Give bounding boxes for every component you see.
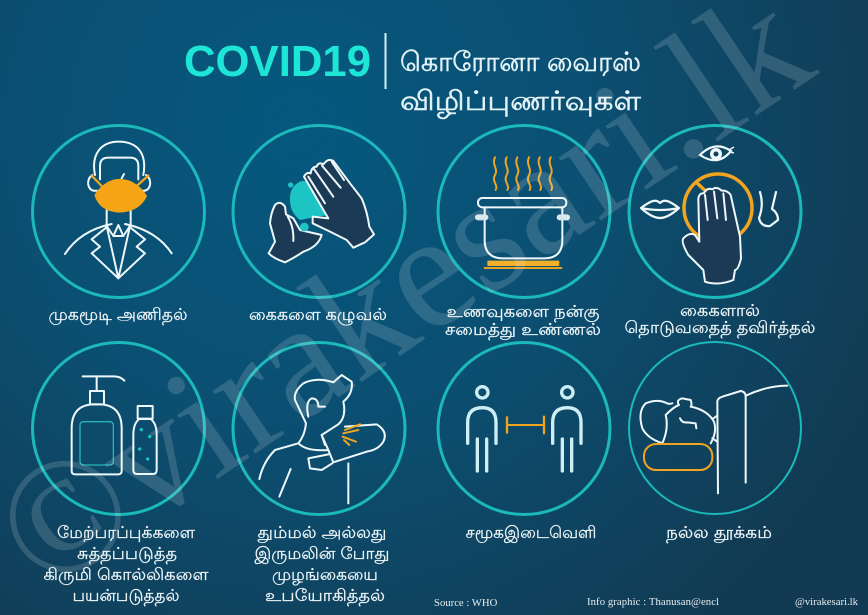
panel: do not touch face	[629, 126, 801, 298]
label: sanitiser	[44, 524, 210, 605]
icon: hand and face parts	[641, 146, 778, 283]
label: cover cough: தும்மல் அல்லது	[258, 524, 386, 543]
label: do not touch face	[624, 302, 816, 337]
label: do not touch face: தொடுவதைத் தவிர்த்தல்	[624, 319, 816, 337]
icon: washing hands	[269, 160, 374, 262]
label: do not touch face: கைகளால்	[680, 302, 760, 320]
icon: person coughing into elbow	[259, 375, 385, 503]
label: cover cough: உபயோகித்தல்	[265, 587, 385, 605]
icon: hand	[683, 188, 741, 283]
title	[184, 33, 642, 119]
label: sanitiser: கிருமி கொல்லிகளை	[44, 566, 210, 585]
title: Tamil	[400, 47, 642, 119]
label: sanitiser: மேற்பரப்புக்களை	[57, 524, 196, 542]
panel: cover cough	[233, 342, 405, 514]
panel: cook food	[438, 126, 610, 298]
label: cover cough: முழங்கையை	[272, 566, 378, 585]
ring	[438, 126, 610, 298]
icon: sleeping person	[640, 386, 787, 493]
label: cook food: சமைத்து உண்ணல்	[445, 321, 601, 340]
icon: sanitiser bottles	[72, 376, 157, 474]
icon: no-touch sign	[684, 174, 752, 242]
icon: lips	[641, 201, 679, 218]
label: good sleep: நல்ல தூக்கம்	[666, 524, 772, 543]
label: cook food	[445, 303, 601, 340]
label: cover cough: இருமலின் போது	[254, 545, 390, 564]
label: face mask: முகமூடி அணிதல்	[48, 306, 188, 325]
panel: good sleep	[629, 342, 801, 514]
icon: eye	[700, 146, 734, 160]
title: COVID19: COVID19	[184, 37, 371, 86]
footer: handle: @virakesari.lk	[795, 596, 859, 608]
icon: two people apart	[468, 387, 581, 471]
panel: sanitiser	[32, 342, 204, 514]
title: Tamil: விழிப்புணர்வுகள்	[400, 86, 642, 119]
title divider	[384, 33, 386, 89]
ring	[629, 342, 801, 514]
footer: source: Source : WHO	[434, 597, 498, 609]
icon: nose	[759, 192, 778, 226]
ring	[233, 342, 405, 514]
label: cook food: உணவுகளை நன்கு	[446, 303, 600, 322]
panel: face mask	[32, 126, 204, 298]
label: sanitiser: பயன்படுத்தல்	[72, 587, 180, 605]
ring	[32, 342, 204, 514]
footer: credit: Info graphic : Thanusan@encl	[587, 596, 719, 608]
panel: distancing	[438, 342, 610, 514]
label: sanitiser: சுத்தப்படுத்த	[77, 545, 177, 563]
label: hand wash: கைகளை கழுவல்	[249, 306, 387, 325]
ring	[438, 342, 610, 514]
panel: hand wash	[233, 126, 405, 298]
icon: person wearing mask	[65, 142, 172, 278]
ring	[32, 126, 204, 298]
label: distancing: சமூகஇடைவெளி	[466, 524, 596, 543]
label: cover cough	[254, 524, 390, 605]
ring	[629, 126, 801, 298]
icon: cooking pot	[475, 157, 570, 269]
ring	[233, 126, 405, 298]
title: Tamil: கொரோனா வைரஸ்	[400, 47, 641, 77]
